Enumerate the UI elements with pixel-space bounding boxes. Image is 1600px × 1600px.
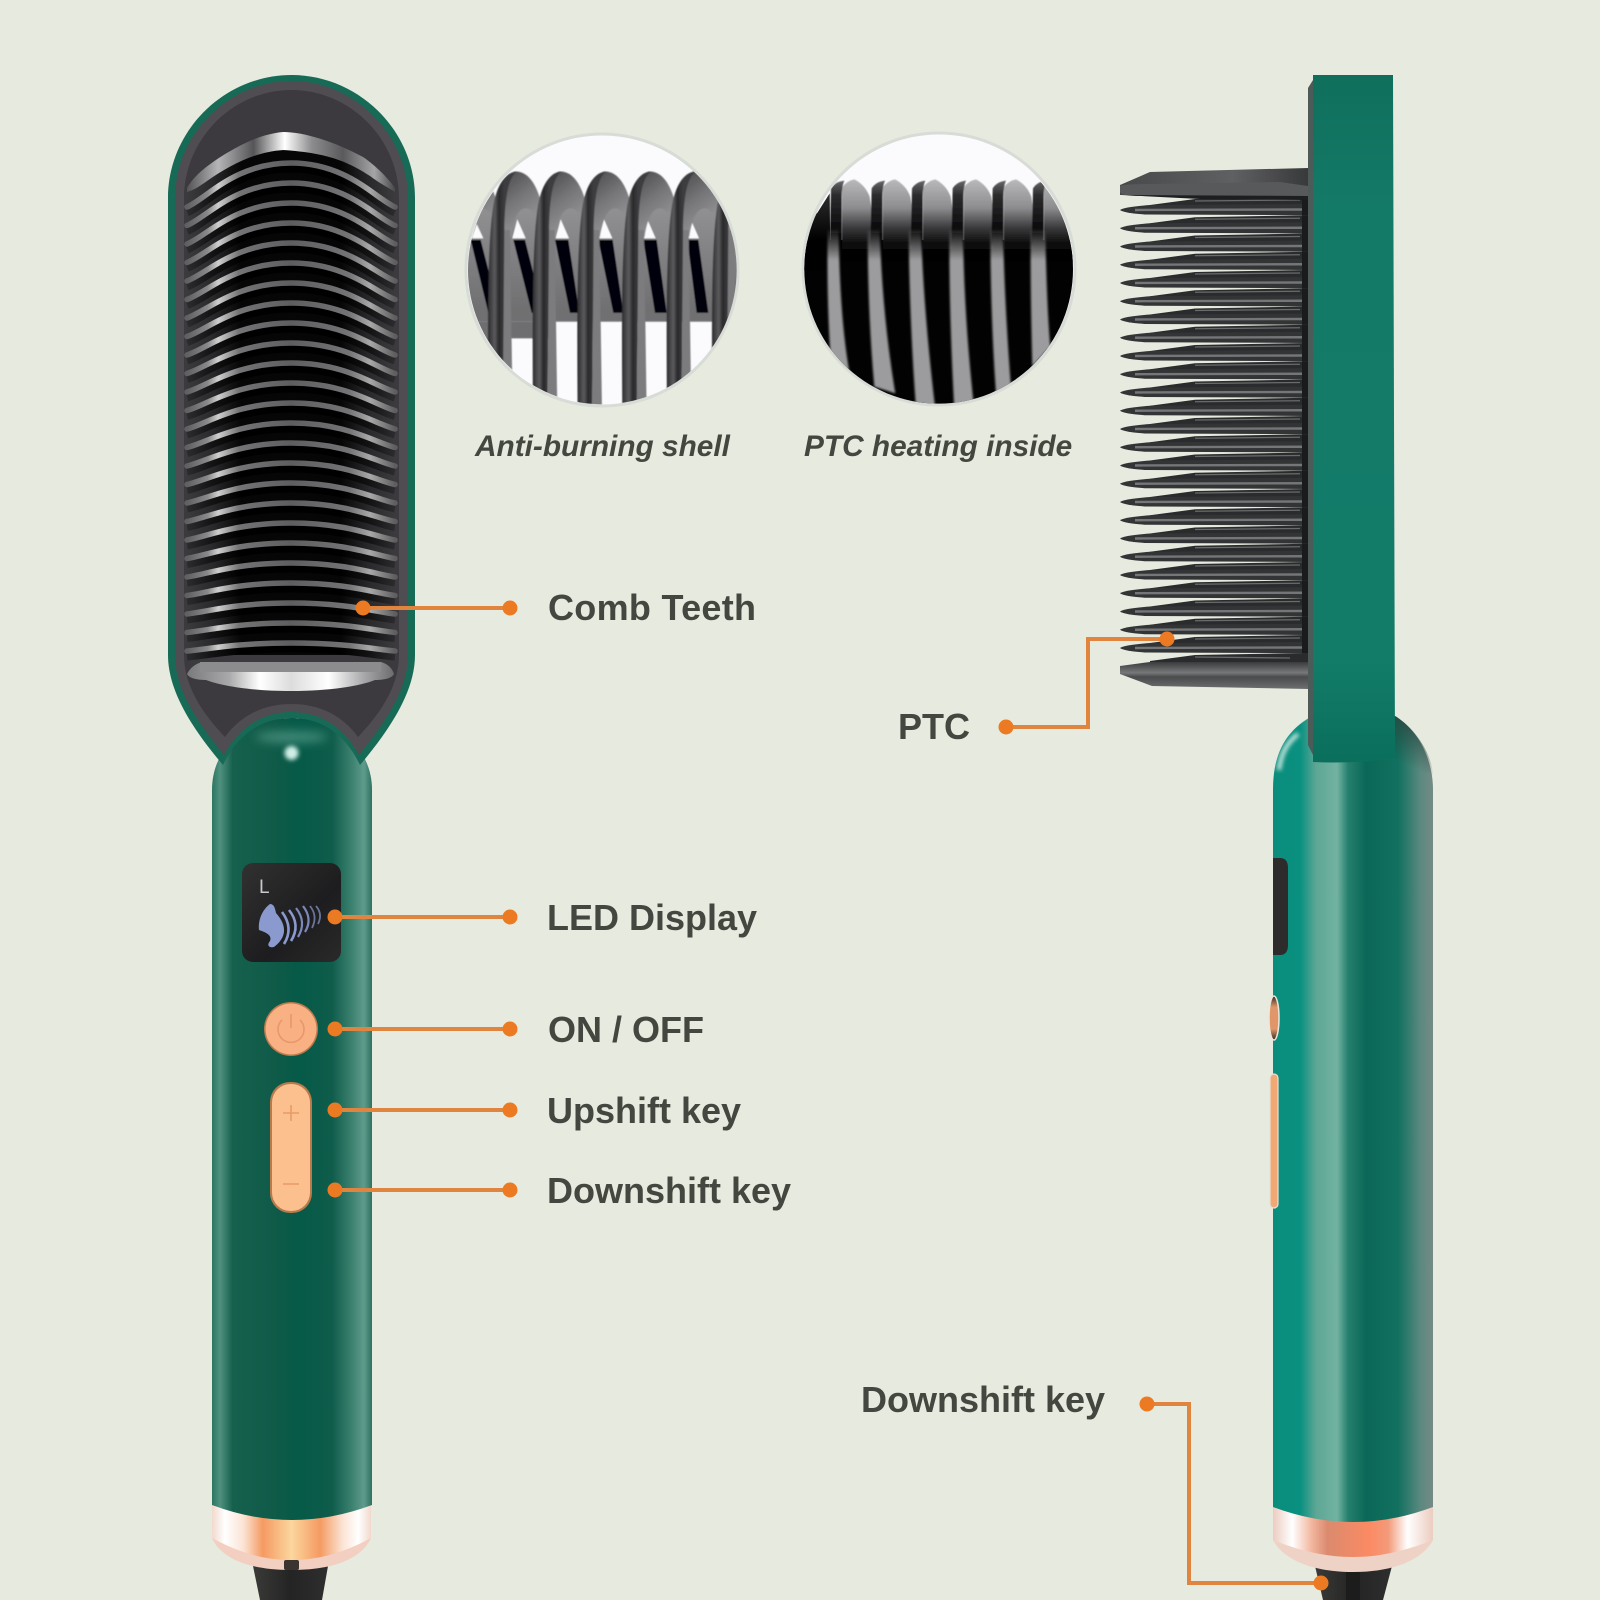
side power button <box>1269 996 1279 1040</box>
LED display <box>242 863 341 962</box>
comb teeth left <box>187 132 395 691</box>
callout: downshift key right: Downshift key <box>861 1379 1105 1420</box>
power cord left <box>253 1566 328 1600</box>
caption: anti-burning shell: Anti-burning shell <box>474 430 731 463</box>
detail circle: PTC heating <box>797 133 1082 413</box>
callout: comb teeth <box>356 587 756 628</box>
callout: on off <box>328 1009 704 1050</box>
right brush side view <box>1120 75 1433 1600</box>
detail circle: anti-burning shell <box>464 132 740 408</box>
callout: comb teeth: Comb Teeth <box>548 587 756 628</box>
brush head shell left <box>168 75 415 765</box>
side shift key <box>1270 1074 1278 1208</box>
callout: PTC <box>898 632 1174 747</box>
green handle left <box>212 718 372 1520</box>
level letter: L <box>259 877 270 898</box>
callout: PTC: PTC <box>898 706 970 747</box>
power button <box>264 1002 318 1056</box>
callout: upshift key: Upshift key <box>547 1090 741 1131</box>
callout: on off: ON / OFF <box>548 1009 704 1050</box>
callout: upshift key <box>328 1090 741 1131</box>
hair icon <box>259 904 320 947</box>
left brush front view <box>168 75 415 1600</box>
caption: PTC heating inside: PTC heating inside <box>804 430 1072 463</box>
plus minus key <box>270 1082 312 1213</box>
callout: LED display: LED Display <box>547 897 757 938</box>
power cord right <box>1315 1562 1392 1600</box>
green head panel <box>1313 75 1395 762</box>
head shaft sliver <box>1308 80 1313 755</box>
callout: downshift key left: Downshift key <box>547 1170 791 1211</box>
callout: downshift key right <box>861 1379 1328 1590</box>
copper ring left <box>212 1505 371 1570</box>
comb teeth right <box>1120 168 1308 689</box>
copper ring right <box>1273 1507 1433 1572</box>
green handle right <box>1273 716 1433 1522</box>
side display <box>1273 858 1288 955</box>
callout: LED display <box>328 897 757 938</box>
infographic canvas <box>168 75 1433 1600</box>
callout: downshift key left <box>328 1170 791 1211</box>
